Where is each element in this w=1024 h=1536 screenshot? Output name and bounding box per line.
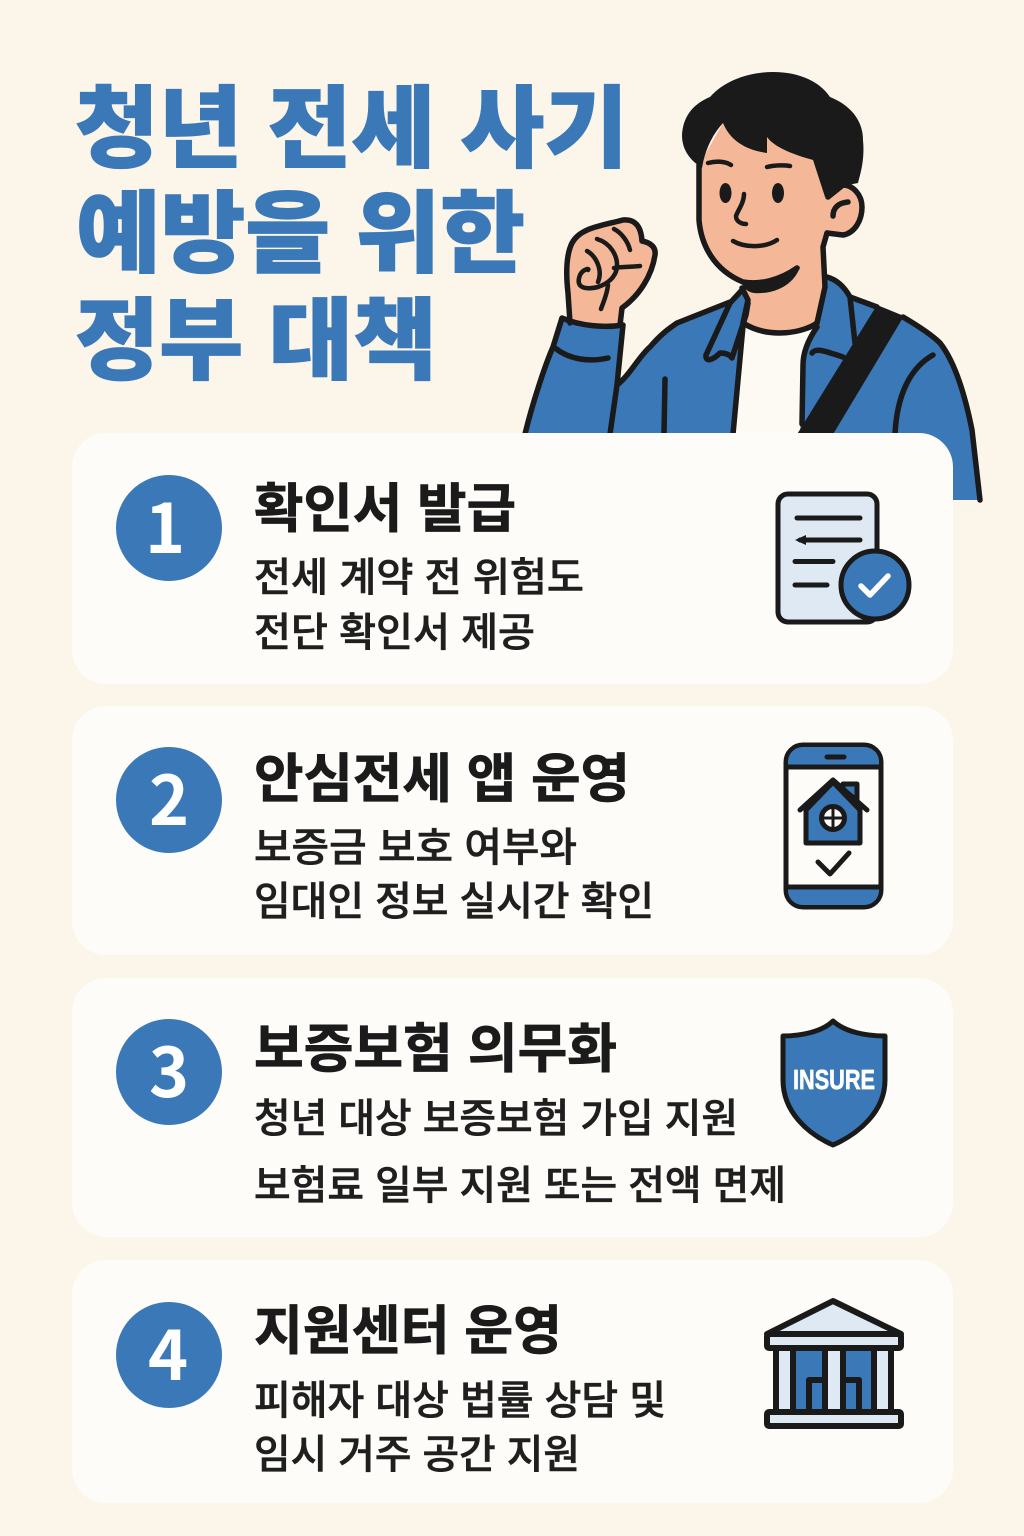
beard shadow	[742, 267, 800, 293]
heading 3: 보증보험 의무화	[254, 1020, 617, 1079]
description 3: 청년 대상 보증보험 가입 지원	[254, 1097, 738, 1141]
bag strap	[796, 305, 904, 436]
ear	[827, 185, 862, 235]
title: 예방을 위한	[76, 184, 525, 284]
icon: insurance shield	[783, 1021, 885, 1145]
title	[75, 79, 628, 391]
description 2	[254, 826, 654, 924]
panel: 지원센터 운영	[72, 1260, 953, 1503]
icon: insurance shield: INSURE	[793, 1064, 875, 1095]
eyes	[720, 183, 784, 203]
description 2: 보증금 보호 여부와	[254, 826, 577, 870]
panel: 확인서 발급	[72, 433, 953, 684]
description 4	[254, 1379, 666, 1477]
face outline	[699, 165, 797, 283]
hair	[682, 72, 863, 197]
description 2: 임대인 정보 실시간 확인	[254, 880, 654, 924]
heading 4: 지원센터 운영	[254, 1302, 562, 1361]
number badge 1: 1	[145, 474, 185, 573]
description 4: 피해자 대상 법률 상담 및	[254, 1379, 666, 1423]
illustration: young man raising a fist	[524, 72, 982, 500]
description 1	[254, 556, 584, 655]
title: 정부 대책	[75, 291, 437, 391]
heading 2: 안심전세 앱 운영	[254, 750, 630, 809]
icon: phone with house	[786, 745, 881, 907]
description 1: 전단 확인서 제공	[254, 611, 535, 655]
finger lines	[579, 229, 640, 309]
number badge 4	[116, 1301, 222, 1408]
panel: 안심전세 앱 운영	[72, 706, 953, 955]
fist	[567, 220, 655, 327]
number badge 2	[116, 746, 222, 853]
neck outline	[742, 233, 827, 333]
jacket	[524, 277, 982, 500]
title: 청년 전세 사기	[75, 79, 628, 179]
number badge 3: 3	[149, 1018, 189, 1117]
description 4: 임시 거주 공간 지원	[254, 1433, 580, 1477]
description 1: 전세 계약 전 위험도	[254, 556, 584, 600]
icon: document with check	[778, 494, 909, 622]
jacket outlines	[525, 277, 980, 500]
number badge 1	[116, 474, 222, 581]
neck and face	[698, 123, 862, 335]
description 3	[254, 1097, 786, 1208]
heading 1: 확인서 발급	[254, 480, 516, 539]
panel: 보증보험 의무화	[72, 978, 953, 1237]
number badge 2: 2	[149, 746, 189, 845]
number badge 4: 4	[148, 1301, 188, 1400]
facial lines	[708, 162, 790, 246]
number badge 3	[116, 1018, 222, 1125]
icon: government building	[767, 1301, 901, 1426]
t-shirt	[733, 323, 817, 436]
description 3: 보험료 일부 지원 또는 전액 면제	[254, 1164, 786, 1208]
